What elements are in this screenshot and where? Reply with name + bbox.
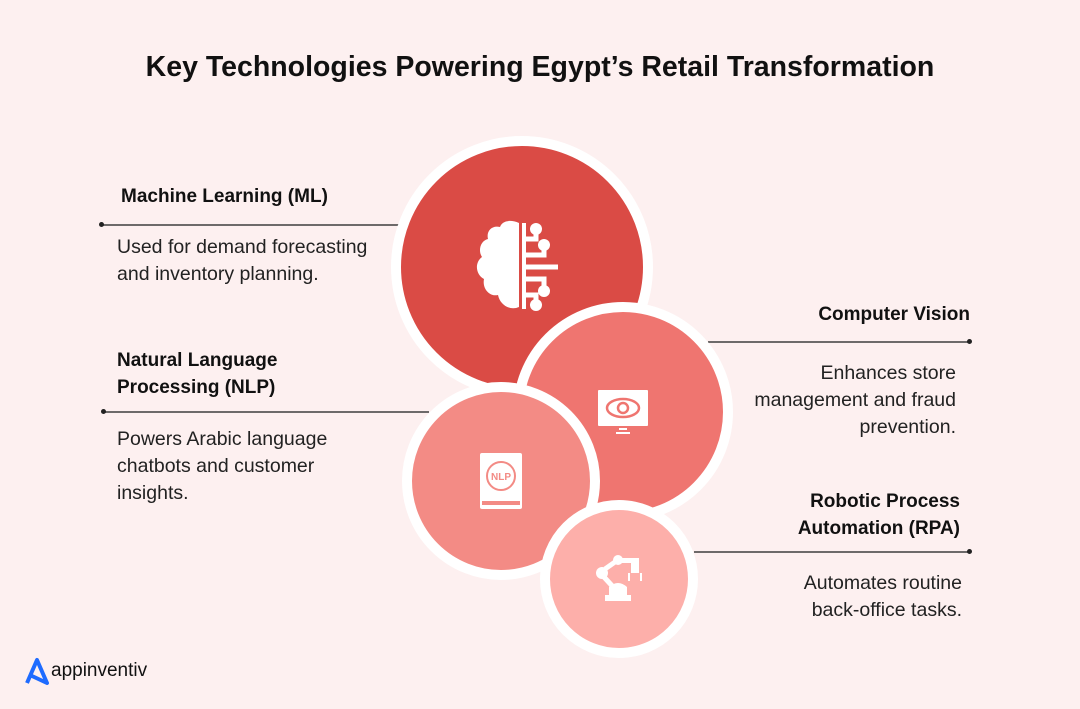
text: NLP: [117, 428, 327, 504]
icon: monitor eye: [598, 390, 648, 434]
heading: NLP: Natural Language: [117, 350, 277, 371]
text: NLP: chatbots and customer: [117, 455, 314, 477]
heading: CV: Computer Vision: [818, 304, 970, 325]
heading: RPA: Robotic Process: [810, 491, 960, 512]
text: ML: [117, 236, 367, 285]
connector: NLP: [103, 411, 429, 412]
text: ML: Used for demand forecasting: [117, 236, 367, 258]
heading: ML: Machine Learning (ML): [121, 186, 328, 207]
icon: NLP book: NLP: [491, 472, 511, 483]
heading: RPA: Automation (RPA): [798, 518, 960, 539]
heading: RPA: [798, 491, 960, 539]
logo: [25, 658, 147, 685]
connector: RPA: [694, 551, 970, 552]
text: CV: management and fraud: [754, 389, 956, 411]
text: CV: [754, 362, 956, 438]
text: RPA: Automates routine: [804, 572, 962, 594]
circle: NLP: [402, 382, 600, 580]
icon: robot arm: [596, 555, 642, 601]
text: NLP: Powers Arabic language: [117, 428, 327, 450]
circle: ML: [391, 136, 653, 398]
heading: NLP: Processing (NLP): [117, 377, 275, 398]
connector: CV: [708, 341, 970, 342]
connector: ML: [101, 224, 401, 226]
text: RPA: back-office tasks.: [812, 599, 962, 621]
title: Key Technologies Powering Egypt’s Retail Transformation: [146, 51, 934, 83]
text: ML: and inventory planning.: [117, 263, 319, 285]
text: NLP: insights.: [117, 482, 189, 504]
circle: Computer Vision: [513, 302, 733, 522]
icon: NLP book: [480, 453, 522, 509]
heading: NLP: [117, 350, 277, 398]
icon: brain: [476, 220, 558, 311]
logo: appinventiv: [51, 660, 147, 681]
text: CV: Enhances store: [820, 362, 956, 384]
circle: RPA: [540, 500, 698, 658]
text: CV: prevention.: [860, 416, 956, 438]
text: RPA: [804, 572, 962, 621]
